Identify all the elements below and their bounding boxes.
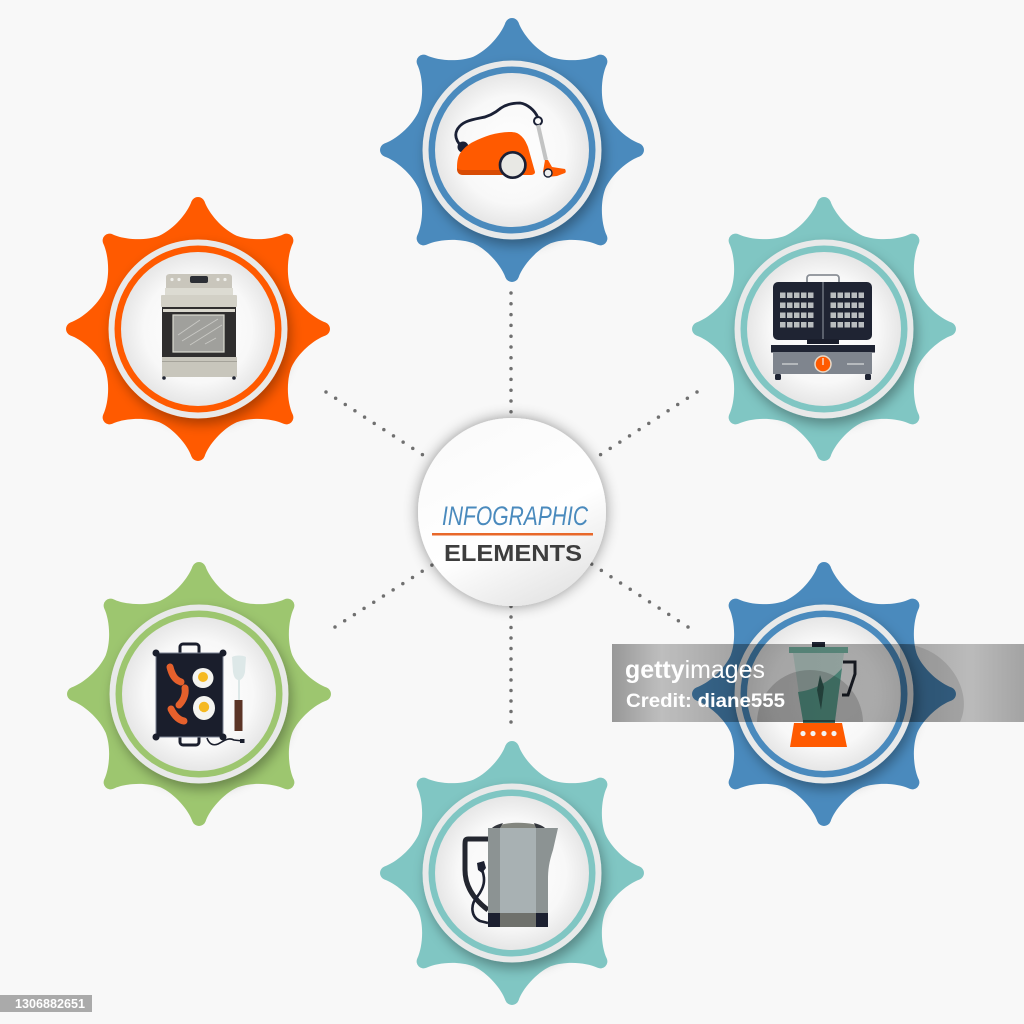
badge rings bbox=[734, 604, 914, 784]
badge rings bbox=[422, 60, 602, 240]
connector: lower right bbox=[590, 563, 688, 627]
panel: oven badge bbox=[66, 197, 330, 461]
panel: blender badge bbox=[692, 562, 956, 826]
connector: upper right bbox=[597, 392, 697, 457]
icon: vacuum cleaner bbox=[456, 103, 566, 178]
panel: vacuum cleaner badge bbox=[380, 18, 644, 282]
image id tag bbox=[0, 995, 92, 1012]
badge: blue star bbox=[380, 18, 644, 282]
panel: waffle maker badge bbox=[692, 197, 956, 461]
connector: upper left bbox=[326, 392, 426, 457]
watermark banner bbox=[612, 644, 1024, 722]
image id number: 1306882651 bbox=[15, 997, 85, 1011]
badge rings bbox=[734, 240, 914, 418]
connector: top bbox=[509, 293, 513, 412]
badge: teal star bbox=[692, 197, 956, 461]
badge: orange star bbox=[66, 197, 330, 461]
icon: blender bbox=[789, 642, 855, 747]
panel: griddle badge bbox=[67, 562, 331, 826]
icon: griddle with eggs and sausages bbox=[152, 644, 246, 745]
badge rings bbox=[110, 604, 288, 784]
watermark background bbox=[612, 644, 1024, 722]
hub divider bbox=[432, 533, 593, 536]
icon: oven range bbox=[161, 274, 237, 380]
badge: green star bbox=[67, 562, 331, 826]
badge: teal star bbox=[380, 741, 644, 1005]
badge: blue star bbox=[692, 562, 956, 826]
connector: bottom bbox=[509, 606, 513, 722]
badge rings bbox=[108, 240, 288, 418]
panel: kettle badge bbox=[380, 741, 644, 1005]
hub title: ELEMENTS: ELEMENTS bbox=[444, 540, 582, 566]
icon: waffle maker bbox=[771, 275, 875, 380]
watermark logo text: gettyimages bbox=[625, 656, 765, 684]
icon: electric kettle bbox=[465, 823, 558, 927]
hub circle bbox=[418, 418, 606, 606]
watermark credit text: Credit: diane555 bbox=[626, 690, 785, 712]
connector: lower left bbox=[335, 565, 432, 627]
hub title: INFOGRAPHIC: INFOGRAPHIC bbox=[442, 501, 588, 531]
badge rings bbox=[422, 784, 602, 962]
panel: centre hub bbox=[418, 418, 606, 606]
